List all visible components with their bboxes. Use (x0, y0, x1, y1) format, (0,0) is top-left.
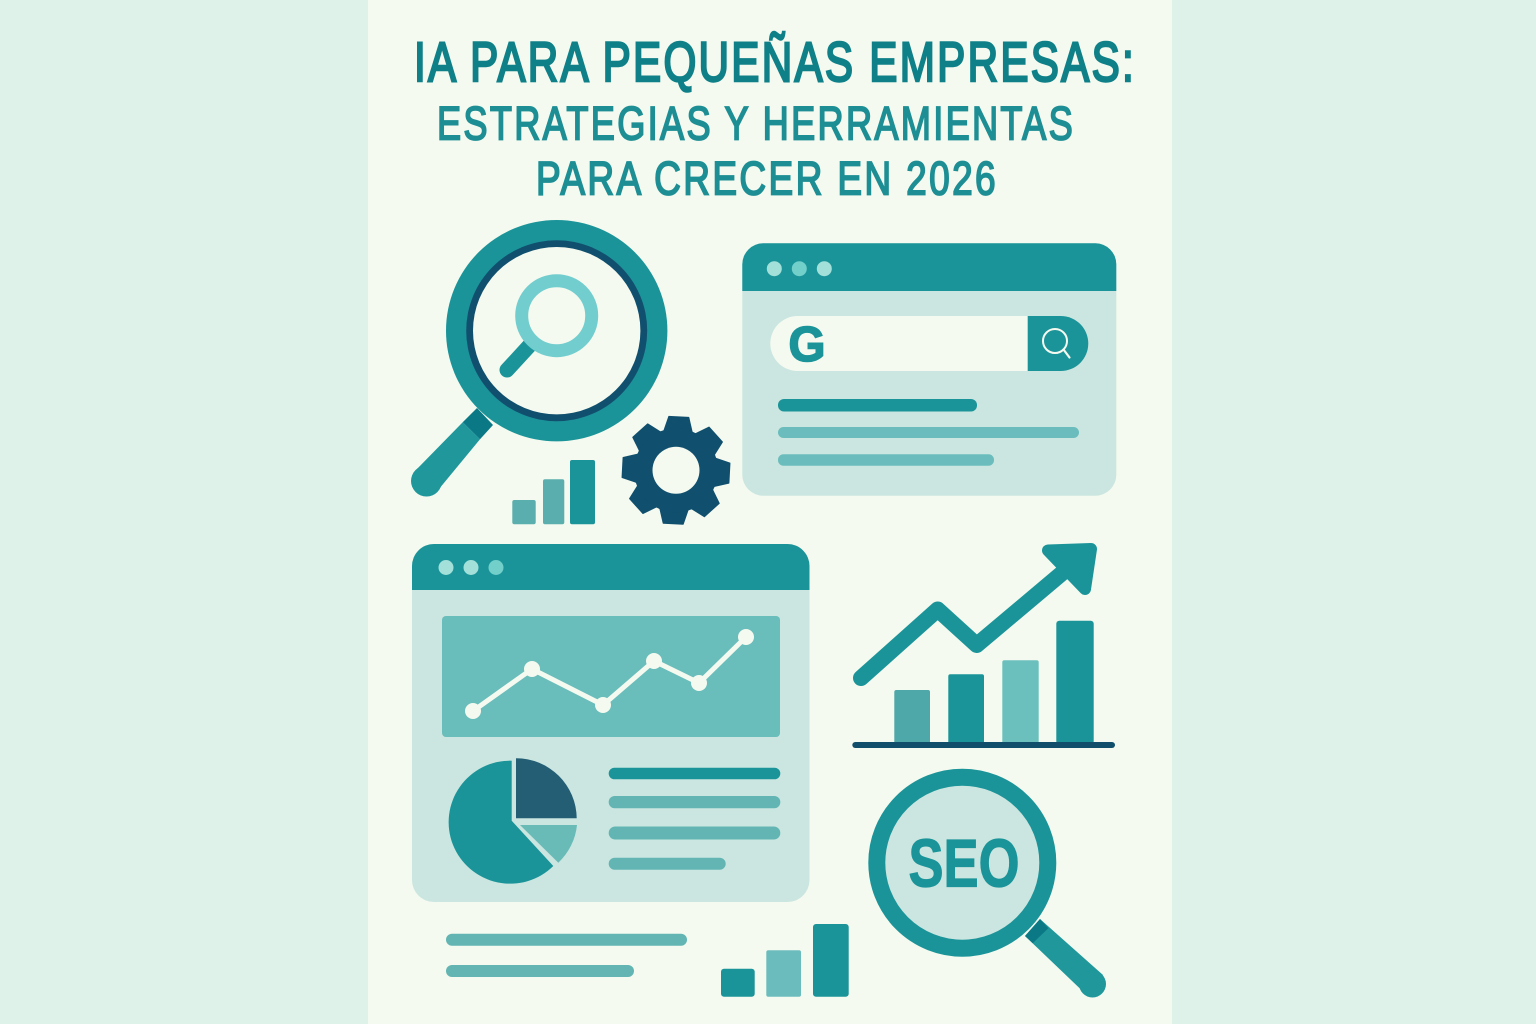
title line 1: IA PARA PEQUEÑAS EMPRESAS: (414, 30, 1136, 93)
small inner magnifier (507, 281, 592, 370)
SEO label: SEO (908, 826, 1020, 902)
icon: gear (622, 416, 730, 525)
icon: SEO magnifying glass (877, 777, 1106, 998)
search bar (770, 316, 1088, 371)
window body (412, 544, 810, 902)
growth arrow (861, 549, 1091, 678)
icon: large magnifying glass (411, 220, 667, 497)
legend lines (609, 768, 780, 870)
handle (411, 408, 493, 496)
lens (877, 777, 1048, 948)
bottom bar chart (721, 924, 849, 997)
window dots (767, 261, 832, 276)
small bar chart (512, 460, 595, 524)
window header (412, 544, 810, 590)
handle (1025, 919, 1106, 998)
window body (742, 243, 1116, 496)
text placeholder lines (446, 934, 687, 977)
bars (894, 621, 1094, 744)
growth chart (852, 549, 1115, 748)
lens ring (446, 220, 667, 441)
icon: G logo: G (788, 318, 826, 372)
line chart (442, 616, 780, 737)
baseline (852, 742, 1115, 748)
panel: search browser window (742, 243, 1116, 496)
title line 3: PARA CRECER EN 2026 (536, 152, 998, 206)
title line 2: ESTRATEGIAS Y HERRAMIENTAS (437, 98, 1075, 150)
window header (742, 243, 1116, 291)
title (414, 30, 1136, 206)
pie chart (449, 758, 577, 884)
panel: analytics dashboard window (412, 544, 810, 902)
window dots (438, 560, 504, 575)
result lines (778, 399, 1079, 466)
central poster panel (368, 0, 1172, 1024)
